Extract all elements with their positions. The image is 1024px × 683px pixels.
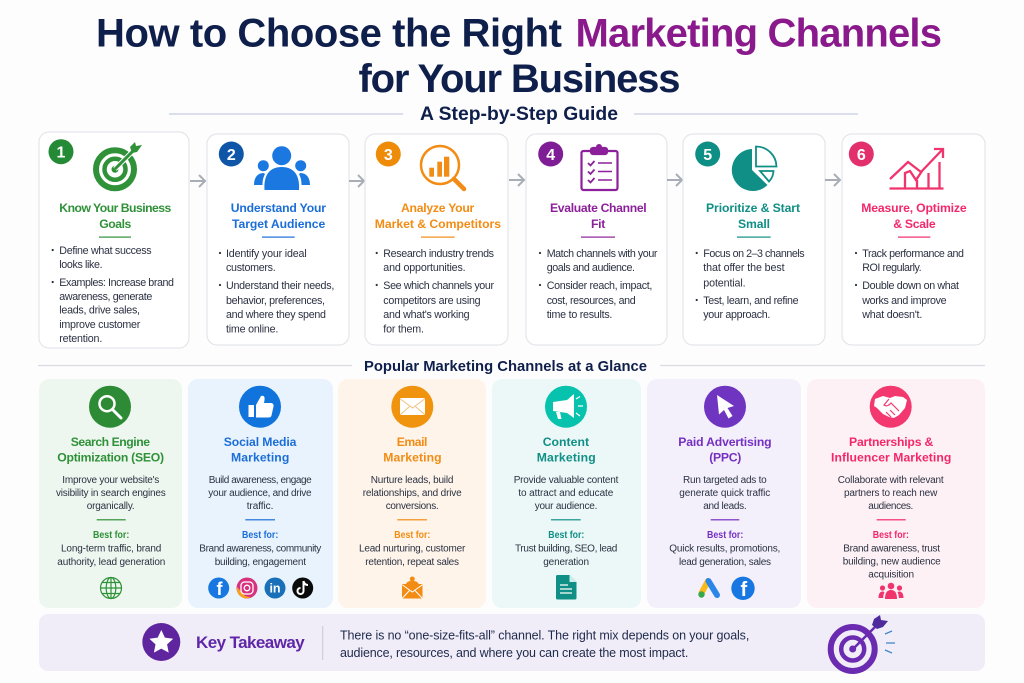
icon: purple target with arrow [831, 615, 895, 671]
step 4 bullets: Match channels with your [547, 248, 658, 260]
ppc best for: lead generation, sales [679, 557, 771, 568]
panel: step 6 measure optimize and scale [842, 134, 985, 345]
step 3 heading: Analyze Your [401, 201, 475, 215]
social description: your audience, and drive [208, 488, 312, 499]
icon: pie chart [732, 146, 776, 191]
partnerships description [838, 475, 944, 512]
icon: growth chart [890, 149, 944, 188]
step 1 bullets: retention. [59, 333, 102, 345]
step 6 heading [861, 201, 967, 231]
step 4 number badge: 4 [546, 147, 555, 164]
social heading: Social Media [224, 435, 297, 449]
ppc description: generate quick traffic [679, 488, 770, 499]
step 3 bullets: See which channels your [383, 280, 494, 292]
arrow: step 3 to 4 [509, 174, 524, 186]
social heading [224, 435, 297, 464]
icon: facebook: f [216, 579, 224, 599]
content description: Provide valuable content [514, 475, 619, 486]
step 5 number badge [695, 142, 720, 166]
panel: social media marketing [188, 379, 333, 608]
step 1 bullets: Define what success [59, 245, 152, 257]
partnerships description: audiences. [868, 501, 913, 512]
step 5 bullets: Test, learn, and refine [703, 295, 799, 307]
icon: tiktok [292, 578, 313, 598]
email description: conversions. [386, 501, 439, 512]
step 4 heading [550, 201, 647, 231]
key takeaway text: audience, resources, and where you can create the most impact. [340, 646, 688, 660]
icon: search [89, 386, 131, 428]
key takeaway text [340, 628, 749, 660]
social description: traffic. [247, 501, 273, 512]
icon: target [96, 142, 142, 188]
seo heading: Optimization (SEO) [57, 450, 164, 464]
step 1 heading [59, 201, 172, 231]
icon: audience [254, 146, 310, 190]
seo description [56, 475, 166, 512]
step 1 bullets: looks like. [59, 259, 103, 271]
social best for [199, 530, 321, 568]
icon: thumbs up [239, 386, 281, 428]
social best for: Brand awareness, community [199, 544, 321, 554]
social best for: building, engagement [215, 557, 306, 568]
partnerships heading: Partnerships & [849, 435, 933, 449]
step 1 heading: Know Your Business [59, 201, 172, 215]
title [96, 12, 942, 101]
ppc best for [669, 530, 780, 568]
step 1 bullets [52, 245, 174, 345]
step 1 bullets: awareness, generate [59, 291, 152, 303]
step 5 bullets: your approach. [703, 309, 770, 321]
panel: step 4 evaluate channel fit [526, 134, 667, 345]
content description [514, 475, 619, 512]
step 2 heading: Target Audience [232, 217, 326, 231]
ppc best for: Best for: [707, 530, 743, 541]
social description: Build awareness, engage [209, 475, 312, 486]
step 6 heading: & Scale [893, 217, 936, 231]
email heading [383, 435, 442, 464]
ppc heading: Paid Advertising [678, 435, 772, 449]
icon: globe [100, 578, 122, 598]
seo description: organically. [87, 501, 135, 512]
step 3 bullets: for them. [383, 324, 424, 336]
icon: envelope [391, 386, 433, 428]
seo best for: authority, lead generation [57, 557, 165, 568]
step 6 bullets [855, 248, 964, 321]
email best for: Best for: [394, 530, 430, 541]
step 4 heading: Fit [591, 217, 605, 231]
icon: document [556, 575, 576, 600]
panel: paid advertising [647, 379, 801, 608]
step 1 bullets: Examples: Increase brand [59, 277, 174, 289]
step 3 bullets: and opportunities. [383, 262, 466, 274]
content best for [515, 530, 617, 568]
email heading: Email [397, 435, 427, 449]
seo heading [57, 435, 164, 464]
step 4 number badge [538, 142, 563, 166]
ppc description: Run targeted ads to [683, 475, 767, 486]
partnerships best for: Brand awareness, trust [843, 544, 940, 554]
step 1 number badge: 1 [57, 144, 66, 162]
step 3 heading: Market & Competitors [375, 217, 501, 231]
step 2 bullets: Identify your ideal [226, 248, 307, 260]
partnerships best for: acquisition [868, 570, 914, 580]
arrow: step 2 to 3 [349, 175, 364, 187]
step 4 bullets: time to results. [547, 309, 612, 321]
step 3 heading [375, 201, 501, 231]
step 3 bullets: and what's working [383, 309, 470, 321]
step 4 heading: Evaluate Channel [550, 201, 647, 215]
step 6 bullets: works and improve [861, 295, 947, 307]
section heading: popular marketing channels: Popular Marketing Channels at a Glance [364, 359, 647, 375]
social description [208, 475, 312, 512]
content heading: Content [543, 435, 589, 449]
step 2 bullets: time online. [226, 324, 278, 336]
arrow: step 5 to 6 [825, 174, 840, 186]
step 6 number badge [849, 142, 874, 166]
email best for: retention, repeat sales [365, 557, 459, 568]
icon: magnifier with bars [421, 146, 464, 189]
step 6 bullets: Double down on what [862, 280, 959, 292]
icon: cursor [704, 386, 746, 428]
step 2 bullets: behavior, preferences, [226, 295, 325, 307]
step 2 number badge: 2 [227, 147, 236, 164]
partnerships heading [831, 435, 951, 464]
partnerships best for [843, 530, 941, 580]
step 5 heading: Small [738, 217, 770, 231]
arrow: step 4 to 5 [667, 174, 682, 186]
step 5 bullets [696, 248, 805, 321]
icon: instagram [236, 578, 258, 598]
panel: search engine optimization [39, 379, 182, 608]
key takeaway label: Key Takeaway [196, 633, 305, 652]
step 5 bullets: Focus on 2–3 channels [703, 248, 805, 260]
icon: checklist clipboard [582, 144, 618, 190]
step 2 bullets: customers. [226, 262, 276, 274]
seo heading: Search Engine [71, 435, 150, 449]
icon: facebook [208, 578, 229, 599]
panel: key takeaway [39, 614, 985, 671]
step 2 heading: Understand Your [231, 201, 326, 215]
email best for: Lead nurturing, customer [359, 544, 466, 554]
step 2 bullets: and where they spend [226, 309, 326, 321]
panel: step 5 prioritize and start small [683, 134, 825, 345]
step 2 heading [231, 201, 326, 231]
panel: partnerships and influencer marketing [807, 379, 985, 608]
email description: Nurture leads, build [371, 475, 453, 486]
step 2 bullets: Understand their needs, [226, 280, 334, 292]
seo best for: Long-term traffic, brand [61, 544, 161, 554]
step 6 heading: Measure, Optimize [861, 201, 967, 215]
icon: facebook [731, 577, 755, 601]
step 6 bullets: ROI regularly. [862, 262, 922, 274]
step 5 heading: Prioritize & Start [706, 201, 800, 215]
step 3 bullets: competitors are using [383, 295, 481, 307]
step 2 number badge [219, 142, 244, 166]
step 1 heading: Goals [99, 217, 132, 231]
panel: step 1 know your business goals [39, 132, 189, 348]
ppc description: and leads. [703, 501, 747, 512]
step 6 bullets: Track performance and [862, 248, 964, 260]
content best for: Best for: [548, 530, 584, 541]
step 5 bullets: potential. [703, 278, 746, 290]
seo description: Improve your website's [62, 475, 159, 486]
step 2 bullets [219, 248, 334, 336]
content best for: Trust building, SEO, lead [515, 544, 617, 554]
step 6 bullets: what doesn't. [861, 309, 922, 321]
seo description: visibility in search engines [56, 488, 166, 499]
content description: to attract and educate [518, 488, 614, 499]
content heading [537, 435, 596, 464]
seo best for [57, 530, 165, 568]
partnerships heading: Influencer Marketing [831, 450, 951, 464]
partnerships best for: building, new audience [843, 556, 941, 568]
content description: your audience. [535, 501, 597, 512]
step 3 number badge [376, 142, 401, 166]
email description: relationships, and drive [363, 488, 462, 499]
email description [363, 475, 462, 512]
step 3 bullets [376, 248, 494, 336]
step 6 number badge: 6 [857, 147, 866, 164]
icon: group of people [878, 583, 904, 599]
panel: step 2 understand your target audience [207, 134, 349, 345]
arrow: step 1 to 2 [190, 175, 205, 187]
seo best for: Best for: [93, 530, 129, 541]
icon: envelope with person [402, 576, 422, 598]
subtitle: A Step-by-Step Guide [420, 104, 618, 125]
icon: star badge [142, 623, 180, 661]
icon: google ads [698, 581, 717, 598]
partnerships description: Collaborate with relevant [838, 475, 944, 486]
ppc description [679, 475, 770, 512]
key takeaway text: There is no “one-size-fits-all” channel. The right mix depends on your goals, [340, 628, 749, 642]
icon: linkedin: in [269, 582, 281, 596]
title: for Your Business [358, 57, 680, 101]
panel: email marketing [338, 379, 486, 608]
step 5 number badge: 5 [703, 147, 712, 164]
step 5 bullets: that offer the best [703, 262, 785, 274]
icon: handshake [870, 386, 912, 428]
email heading: Marketing [383, 450, 442, 464]
ppc heading: (PPC) [709, 450, 741, 464]
step 3 number badge: 3 [384, 147, 393, 164]
title: How to Choose the Right [96, 12, 562, 56]
content heading: Marketing [537, 450, 596, 464]
step 4 bullets: Consider reach, impact, [547, 280, 652, 292]
title: Marketing Channels [576, 12, 942, 56]
step 1 number badge [48, 139, 74, 164]
partnerships description: partners to reach new [844, 488, 938, 499]
step 3 bullets: Research industry trends [383, 248, 494, 260]
step 5 heading [706, 201, 800, 231]
step 4 bullets [539, 248, 658, 321]
panel: content marketing [492, 379, 641, 608]
email best for [359, 530, 466, 568]
social heading: Marketing [231, 450, 289, 464]
icon: megaphone [545, 386, 587, 428]
icon: facebook: f [740, 579, 747, 601]
partnerships best for: Best for: [873, 530, 909, 541]
content best for: generation [543, 557, 589, 568]
step 4 bullets: cost, resources, and [547, 295, 636, 307]
icon: linkedin [264, 578, 286, 598]
ppc heading [678, 435, 772, 464]
panel: step 3 analyze your market and competitors [365, 134, 508, 345]
ppc best for: Quick results, promotions, [669, 544, 780, 554]
step 1 bullets: improve customer [59, 319, 141, 331]
step 4 bullets: goals and audience. [547, 262, 635, 274]
social best for: Best for: [242, 530, 278, 541]
step 1 bullets: leads, drive sales, [59, 304, 140, 316]
